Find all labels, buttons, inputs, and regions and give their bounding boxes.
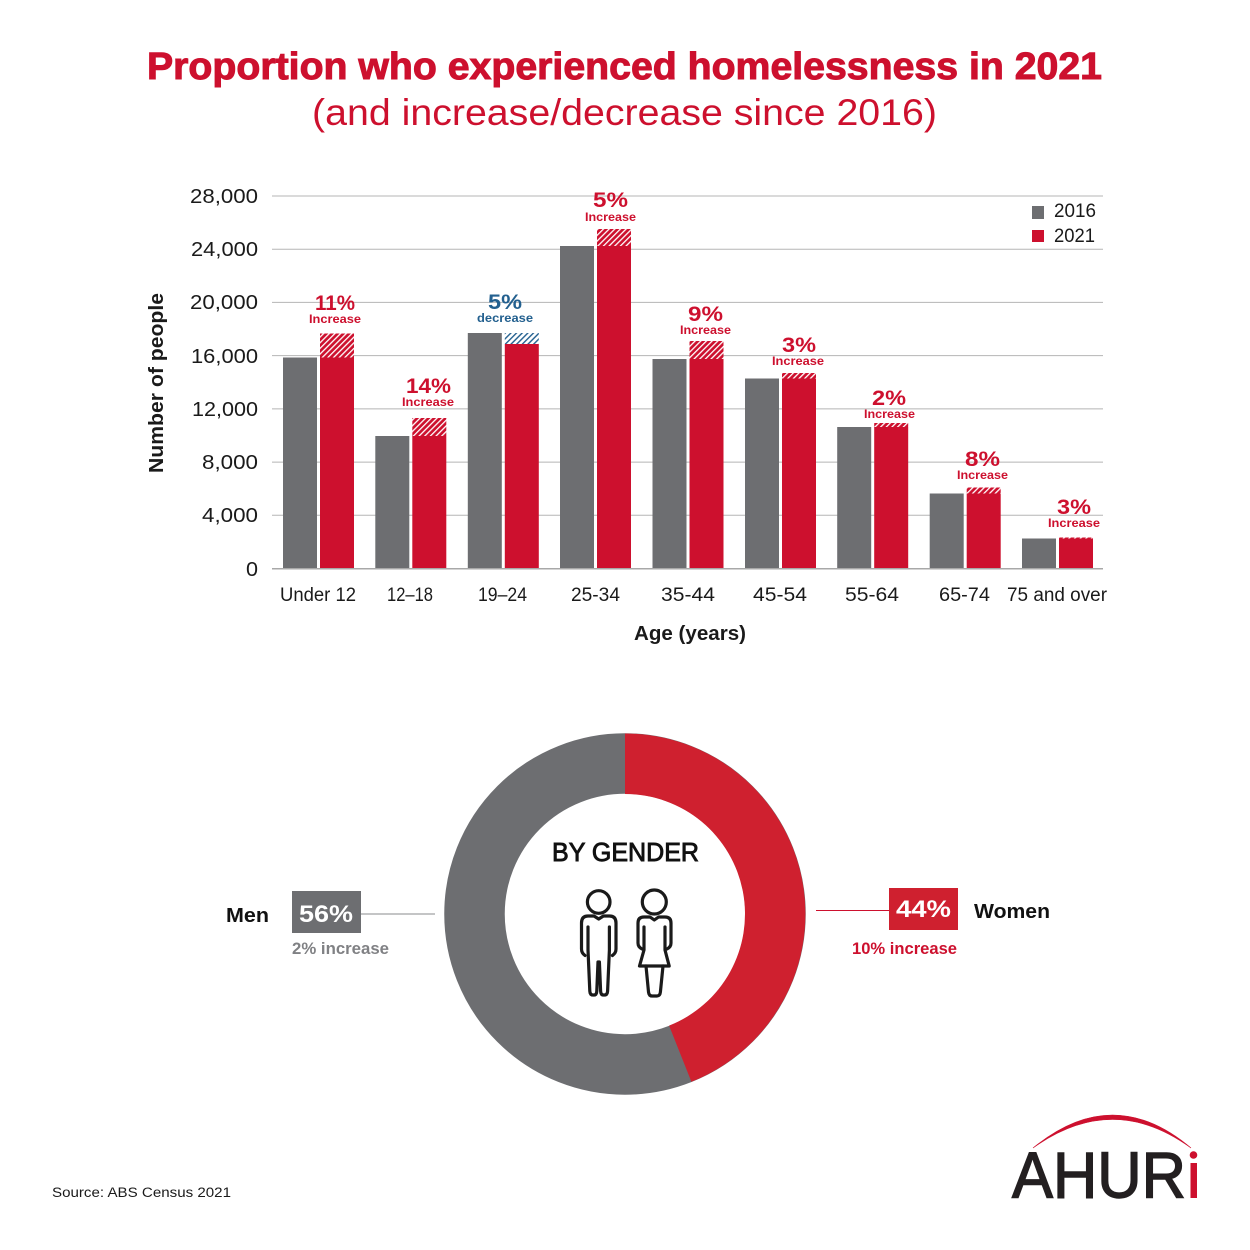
donut chart: by gender bbox=[474, 734, 805, 1082]
change labels bbox=[309, 188, 1100, 530]
change labels: 8% bbox=[965, 447, 1000, 471]
change labels: 9% bbox=[688, 302, 723, 326]
legend: 2021 bbox=[1054, 226, 1095, 247]
y-axis tick labels: 16,000 bbox=[191, 345, 258, 368]
title bbox=[147, 46, 1102, 133]
y-axis tick labels: 4,000 bbox=[202, 504, 258, 527]
x-axis category labels: 35-44 bbox=[661, 585, 715, 606]
y-axis title: Number of people bbox=[146, 293, 168, 473]
change labels: 11% bbox=[315, 291, 355, 315]
y-axis tick labels: 24,000 bbox=[191, 238, 258, 261]
change labels: decrease bbox=[477, 311, 533, 325]
change labels: Increase bbox=[1048, 516, 1100, 530]
callout: men bbox=[226, 891, 435, 958]
change labels: Increase bbox=[680, 323, 731, 337]
change labels: Increase bbox=[957, 468, 1008, 482]
callout: women: 10% increase bbox=[852, 940, 957, 958]
callout: men: 56% bbox=[299, 901, 353, 928]
y-axis tick labels: 28,000 bbox=[190, 185, 258, 208]
y-axis tick labels: 20,000 bbox=[190, 291, 258, 314]
change labels: Increase bbox=[585, 210, 636, 224]
y-axis tick labels bbox=[190, 185, 258, 581]
title line 1: Proportion who experienced homelessness in 2021 bbox=[147, 46, 1102, 88]
x-axis title: Age (years) bbox=[634, 623, 746, 645]
x-axis category labels bbox=[280, 585, 1108, 606]
source note: Source: ABS Census 2021 bbox=[52, 1185, 231, 1200]
callout: men: 2% increase bbox=[292, 940, 389, 958]
change labels: 3% bbox=[782, 333, 816, 357]
y-axis tick labels: 12,000 bbox=[192, 398, 258, 421]
x-axis category labels: 19–24 bbox=[478, 585, 527, 606]
logo: AHURI: AHUR bbox=[1012, 1138, 1186, 1212]
icon: woman bbox=[638, 890, 671, 996]
hatched change segments bbox=[320, 229, 1093, 538]
x-axis category labels: 65-74 bbox=[939, 585, 990, 606]
change labels: 3% bbox=[1057, 495, 1091, 519]
change labels: 14% bbox=[406, 374, 451, 398]
change labels: Increase bbox=[864, 407, 915, 421]
x-axis category labels: 12–18 bbox=[387, 585, 433, 606]
bars 2021 bbox=[320, 246, 1093, 568]
change labels: 5% bbox=[593, 188, 628, 212]
y-axis tick labels: 0 bbox=[246, 558, 258, 581]
legend bbox=[1032, 201, 1096, 247]
x-axis category labels: 75 and over bbox=[1007, 585, 1108, 606]
callout: men: Men bbox=[226, 905, 269, 927]
bar chart: number of people by age bbox=[146, 185, 1108, 645]
x-axis category labels: 55-64 bbox=[845, 585, 899, 606]
change labels: Increase bbox=[772, 354, 824, 368]
callout: women: Women bbox=[974, 901, 1050, 923]
x-axis category labels: 25-34 bbox=[571, 585, 620, 606]
men percentage box bbox=[292, 891, 361, 933]
callout: women bbox=[816, 888, 1050, 958]
change labels: 5% bbox=[488, 290, 522, 314]
icon: man bbox=[582, 891, 616, 995]
bars 2016 bbox=[283, 246, 1056, 568]
x-axis category labels: Under 12 bbox=[280, 585, 356, 606]
donut centre heading: BY GENDER bbox=[552, 837, 699, 867]
change labels: 2% bbox=[872, 386, 906, 410]
women percentage box bbox=[889, 888, 958, 930]
legend: 2016 bbox=[1054, 201, 1096, 222]
y-axis tick labels: 8,000 bbox=[202, 451, 258, 474]
change labels: Increase bbox=[402, 395, 454, 409]
title line 2: (and increase/decrease since 2016) bbox=[312, 92, 937, 133]
x-axis category labels: 45-54 bbox=[753, 585, 807, 606]
callout: women: 44% bbox=[896, 896, 951, 923]
change labels: Increase bbox=[309, 312, 361, 326]
